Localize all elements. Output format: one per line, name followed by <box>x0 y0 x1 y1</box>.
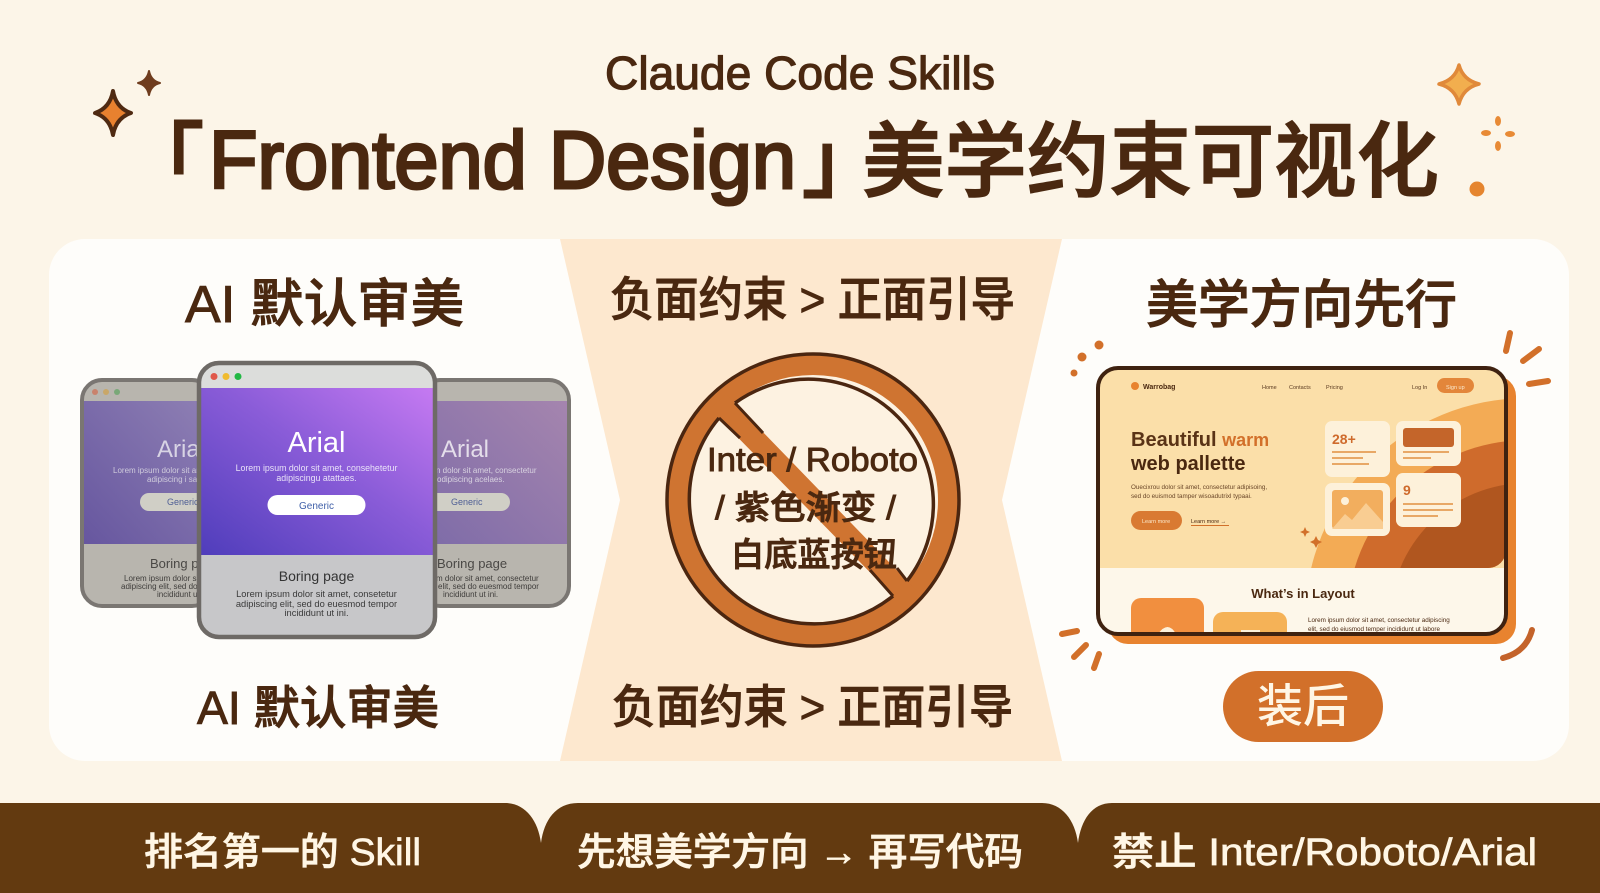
feature cards: 9 <box>1403 482 1411 498</box>
nav bar: Home <box>1262 385 1277 391</box>
section: What's in Layout: What’s in Layout <box>1251 586 1355 601</box>
illustration: right generic window: m dolor sit amet, consectetur <box>436 574 539 583</box>
sparkles <box>1300 527 1322 548</box>
footer: item 2: 先想美学方向 → 再写代码 <box>577 832 1023 874</box>
hero copy: Learn more → <box>1191 519 1226 525</box>
illustration: left generic window: adipiscing i sat <box>147 475 200 484</box>
illustration: left generic window: Lorem ipsum dolor sit amet <box>113 466 210 475</box>
hero copy <box>1130 429 1269 530</box>
illustration: right generic window: Boring page <box>437 556 507 571</box>
badge: after: 装后 <box>1257 680 1349 732</box>
hero copy: sed do euismod tamper wisoadutrixl typaai. <box>1131 493 1252 500</box>
illustration: centre generic window: adipiscingu atattaes. <box>276 473 357 483</box>
title: 」 <box>802 117 884 208</box>
illustration: left generic window: Aria <box>157 436 200 463</box>
text: banned defaults: 白底蓝按钮 <box>731 536 897 573</box>
illustration: centre generic window: adipiscing elit, sed do euesmod tempor <box>236 599 397 609</box>
section: What's in Layout <box>1131 588 1450 632</box>
illustration: centre generic window: Arial <box>287 427 346 459</box>
illustration: centre generic window <box>199 363 435 637</box>
illustration: left generic window: incididunt ut <box>157 590 200 599</box>
text: banned defaults: / 紫色渐变 / <box>715 489 897 526</box>
panel: centre band <box>560 239 1062 761</box>
illustration: centre generic window: incididunt ut ini. <box>284 608 349 618</box>
prohibition bar <box>710 394 916 605</box>
footer: item 1: 排名第一的 Skill <box>144 832 421 874</box>
illustration: right generic window: n dolor sit amet, consectetur <box>436 466 537 475</box>
illustration: left generic window: Lorem ipsum dolor sit amet <box>124 574 221 583</box>
title: Claude Code Skills <box>605 47 995 99</box>
illustration: right generic window: incididunt ut ini. <box>443 590 498 599</box>
heading: AI default aesthetics: AI 默认审美 <box>185 276 464 334</box>
feature cards <box>1325 421 1461 536</box>
nav bar: Sign up <box>1446 385 1465 391</box>
hero copy: Beautiful warm <box>1131 429 1269 451</box>
illustration: centre generic window: Lorem ipsum dolor sit amet, consehetetur <box>236 463 397 473</box>
hero copy: Ouecixrou dolor sit amet, consectetur adipisoing, <box>1131 484 1267 491</box>
section: What's in Layout: elit, sed do eiusmod temper incididunt ut labore <box>1308 626 1440 633</box>
text: banned defaults: Inter / Roboto <box>707 441 918 478</box>
badge: after <box>1223 671 1383 742</box>
feature cards: 28+ <box>1332 431 1356 447</box>
hero copy: web pallette <box>1130 453 1245 475</box>
button: Generic <box>268 495 366 515</box>
illustration: centre generic window: Lorem ipsum dolor sit amet, consetetur <box>236 589 397 599</box>
icon: prohibition sign <box>667 354 959 646</box>
icon: window dots <box>210 373 242 380</box>
panel: comparison card <box>49 239 1569 761</box>
illustration: left generic window <box>80 378 198 608</box>
footer: item 3: 禁止 Inter/Roboto/Arial <box>1112 832 1537 874</box>
arcs <box>1311 399 1504 568</box>
heading: negative constraints: 负面约束 > 正面引导 <box>610 273 1015 326</box>
section: What's in Layout: Lorem ipsum dolor sit amet, consectetur adipiscing <box>1308 617 1450 624</box>
title: Frontend Design <box>209 115 796 206</box>
icon: right sparkles <box>1439 65 1515 196</box>
button: Generic: Generic <box>299 501 334 512</box>
title: 美学约束可视化 <box>862 117 1439 208</box>
nav bar: Log In <box>1412 385 1427 391</box>
illustration: right generic window: elit, sed do euesmod tempor <box>438 582 539 591</box>
illustration: left generic window: Boring page <box>150 556 220 571</box>
illustration: right generic window <box>436 378 571 608</box>
hero copy: Learn more <box>1142 519 1170 525</box>
text: banned defaults <box>707 441 918 573</box>
illustration: right generic window: Generic <box>451 497 483 507</box>
illustration: left generic window: adipiscing elit, sed do eu <box>121 582 209 591</box>
heading: aesthetic direction first: 美学方向先行 <box>1146 277 1457 335</box>
icon: decorative strokes around warm window <box>1062 333 1548 668</box>
nav bar <box>1131 378 1474 393</box>
illustration: centre generic window: Boring page <box>279 568 354 584</box>
nav bar: Contacts <box>1289 385 1311 391</box>
illustration: left generic window: Generic <box>167 497 199 507</box>
nav bar: Warrobag <box>1143 384 1175 391</box>
caption: negative constraints: 负面约束 > 正面引导 <box>612 681 1013 733</box>
title <box>122 47 1439 208</box>
nav bar: Pricing <box>1326 385 1343 391</box>
title: 「 <box>122 117 204 208</box>
footer band <box>0 803 1600 893</box>
illustration: right generic window: odipiscing acelaes. <box>437 475 505 484</box>
illustration: right generic window: Arial <box>441 436 489 463</box>
caption: AI default aesthetics: AI 默认审美 <box>197 682 439 734</box>
illustration: warm landing page window <box>1096 366 1516 644</box>
icon: left sparkles <box>95 71 160 135</box>
